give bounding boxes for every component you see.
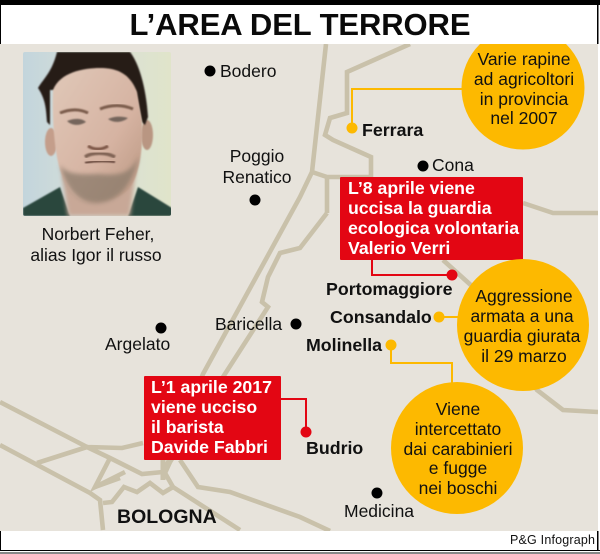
callout: Portomaggiore: ecologica volontaria [348, 218, 519, 238]
place: Medicina [344, 488, 414, 521]
callout: Consandalo: guardia giurata [464, 326, 581, 346]
bubble: rapine: nel 2007 [490, 108, 558, 128]
callout: Budrio: Budrio [306, 438, 363, 458]
place: Poggio Renatico: Renatico [222, 167, 292, 187]
ears [45, 128, 57, 156]
bubble: rapine: ad agricoltori [474, 69, 574, 89]
callout: Budrio [144, 376, 363, 460]
face [53, 68, 142, 203]
place: Bodero: Bodero [220, 61, 276, 81]
place: Argelato [105, 322, 170, 354]
bubble: rapine: in provincia [480, 89, 569, 109]
brows [60, 106, 133, 113]
place: Baricella: Baricella [215, 314, 282, 334]
callout: Budrio: il barista [151, 417, 224, 437]
callout: Molinella: nei boschi [419, 478, 497, 498]
callout: Molinella: Viene [436, 399, 480, 419]
callout: Budrio: Davide Fabbri [151, 437, 268, 457]
place: Medicina: Medicina [344, 501, 414, 521]
callout: Portomaggiore [326, 177, 523, 299]
place: Argelato: Argelato [105, 334, 170, 354]
callout: Molinella [306, 335, 523, 514]
place: Poggio Renatico: Poggio [230, 146, 284, 166]
place: Poggio Renatico [222, 146, 292, 206]
eyes [67, 117, 128, 125]
place: Bologna: BOLOGNA [117, 506, 217, 528]
mouth [85, 161, 115, 163]
hair [38, 52, 148, 125]
callout: Budrio: L’1 aprile 2017 [151, 377, 272, 397]
callout: Molinella: Molinella [306, 335, 382, 355]
callout: Consandalo: il 29 marzo [481, 346, 567, 366]
callout: Portomaggiore: L’8 aprile viene [348, 178, 475, 198]
shirt [23, 187, 172, 216]
nose [88, 146, 108, 149]
callout: Molinella: intercettato [415, 419, 501, 439]
title: L’AREA DEL TERRORE [130, 7, 470, 42]
neck [62, 170, 136, 216]
callout: Ferrara [346, 44, 584, 150]
callout: Ferrara: Ferrara [362, 120, 423, 140]
callout: Portomaggiore: Valerio Verri [348, 238, 450, 258]
callout: Budrio: viene ucciso [151, 397, 257, 417]
photo caption [30, 224, 162, 265]
callout: Molinella: dai carabinieri [404, 439, 512, 459]
callout: Consandalo [330, 259, 589, 391]
callout: Portomaggiore: uccisa la guardia [348, 198, 492, 218]
stubble [60, 155, 139, 203]
credit: P&G Infograph [510, 533, 595, 547]
callout: Consandalo: armata a una [470, 306, 574, 326]
mustache [85, 153, 115, 157]
callout: Consandalo: Consandalo [330, 307, 432, 327]
bubble: aggressione [457, 259, 589, 391]
bubble: rapine: Varie rapine [477, 49, 571, 69]
callout: Molinella: e fugge [429, 458, 487, 478]
place: Cona: Cona [432, 155, 474, 175]
bubble: intercettato [391, 382, 523, 514]
callout: Portomaggiore: Portomaggiore [326, 279, 453, 299]
title bar [0, 0, 600, 44]
photo caption: Norbert Feher, [42, 224, 154, 244]
photo: Norbert Feher [23, 52, 172, 216]
photo caption: alias Igor il russo [30, 245, 162, 265]
callout: Consandalo: Aggressione [475, 286, 573, 306]
bubble: rapine [462, 44, 584, 150]
